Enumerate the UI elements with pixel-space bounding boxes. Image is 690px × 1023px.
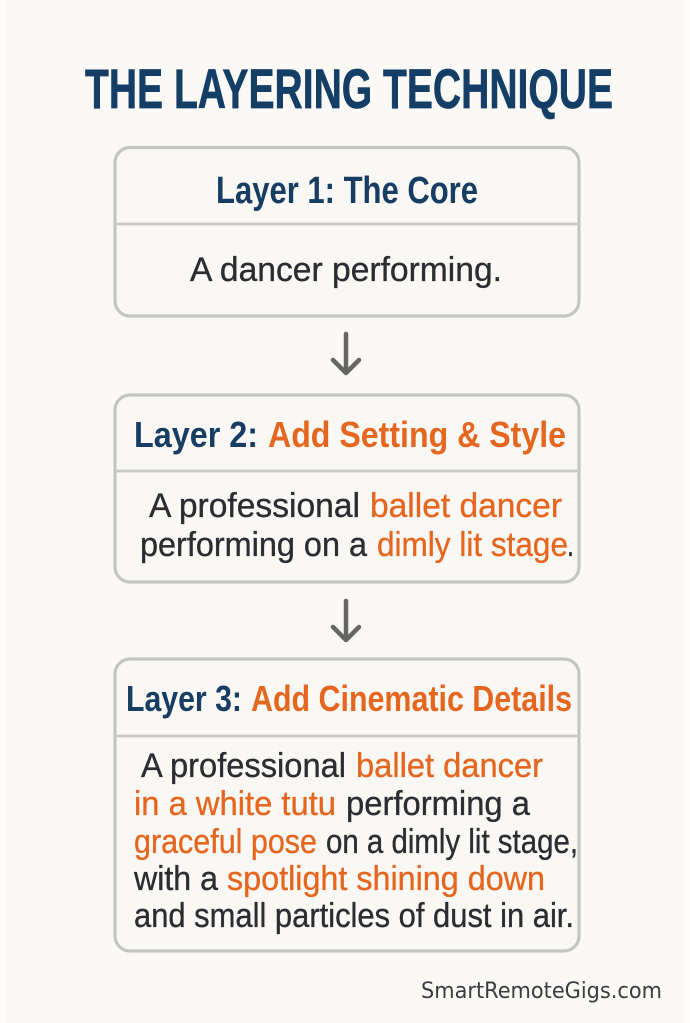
text: layer 2 body bbox=[140, 487, 574, 564]
panel: layer 3 bbox=[115, 659, 579, 951]
text: layer 3 body: spotlight shining down bbox=[227, 860, 545, 898]
heading: layer 2: Layer 2: bbox=[134, 414, 258, 455]
text: layer 2 body: A professional bbox=[149, 487, 360, 525]
panel: layer 2 bbox=[115, 395, 579, 582]
text: layer 2 body: dimly lit stage bbox=[377, 526, 568, 564]
text: layer 3 body: graceful pose bbox=[134, 823, 317, 861]
heading: layer 3 bbox=[126, 678, 572, 719]
heading: layer 1: Layer 1: The Core bbox=[216, 170, 478, 212]
text: layer 3 body: in a white tutu bbox=[134, 785, 336, 823]
text: layer 3 body: on a dimly lit stage, bbox=[326, 823, 578, 861]
arrow: layer 1 to layer 2 bbox=[333, 334, 359, 373]
panel: layer 1 bbox=[115, 148, 579, 316]
text: layer 3 body: ballet dancer bbox=[356, 747, 543, 785]
text: layer 2 body: ballet dancer bbox=[370, 487, 562, 525]
text: layer 3 body bbox=[133, 747, 578, 935]
heading: layer 3: Add Cinematic Details bbox=[251, 678, 572, 719]
text: layer 2 body: . bbox=[567, 526, 574, 564]
text: layer 2 body: performing on a bbox=[140, 526, 367, 564]
text: layer 3 body: and small particles of dust in air. bbox=[134, 897, 574, 935]
text: layer 1 body: A dancer performing. bbox=[190, 251, 502, 289]
arrow: layer 2 to layer 3 bbox=[333, 601, 359, 640]
text: layer 3 body: with a bbox=[133, 860, 218, 898]
footer: website credit: SmartRemoteGigs.com bbox=[421, 979, 662, 1004]
heading: layer 3: Layer 3: bbox=[126, 678, 242, 719]
heading: layer 2 bbox=[134, 414, 566, 455]
text: layer 3 body: performing a bbox=[346, 785, 530, 823]
heading: layer 2: Add Setting & Style bbox=[268, 414, 566, 455]
text: layer 3 body: A professional bbox=[141, 747, 346, 785]
